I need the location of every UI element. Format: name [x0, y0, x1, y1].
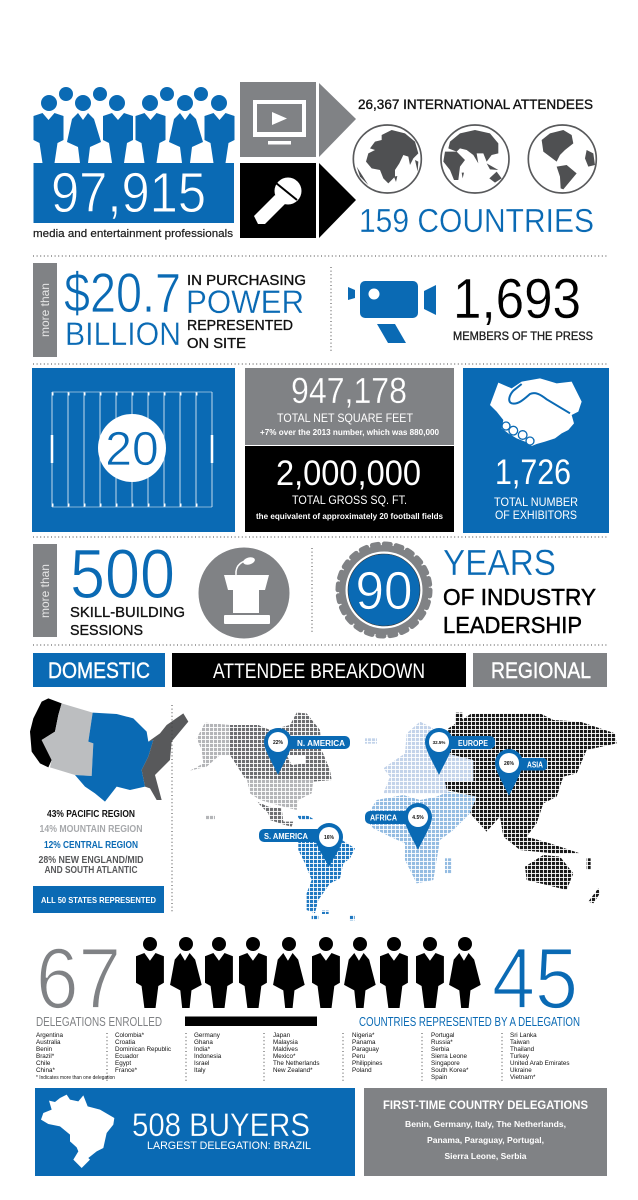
panel: gross square feet: the equivalent of approximately 20 football fields	[256, 512, 444, 521]
figure: billion: BILLION	[65, 316, 181, 352]
panel: net square feet: TOTAL NET SQUARE FEET	[277, 411, 414, 425]
legend: domestic regions	[38, 809, 144, 876]
list: delegations column 2: Colombia*	[115, 1032, 145, 1039]
icon: Brazil silhouette	[41, 1095, 114, 1168]
heading: countries represented: COUNTRIES REPRESENTED BY A DELEGATION	[359, 1015, 580, 1029]
icon: globe Americas	[528, 125, 596, 193]
list: delegations column 5: Panama	[352, 1039, 376, 1046]
figure: 45 countries: 45	[492, 931, 578, 1027]
black divider bar	[185, 1016, 317, 1026]
figure: 97,915: 97,915	[51, 161, 206, 225]
panel: skill-building sessions: SESSIONS	[70, 622, 143, 639]
list: delegations column 1: Australia	[36, 1039, 61, 1046]
pin: Europe 32.5%: 32.5%	[433, 740, 445, 745]
callout: all 50 states: ALL 50 STATES REPRESENTED	[41, 895, 156, 905]
chart: USA regional map	[30, 698, 188, 802]
pin: Europe 32.5%	[425, 728, 495, 775]
heading: regional: REGIONAL	[491, 658, 591, 683]
badge: 90	[338, 544, 430, 636]
icon: globe Africa and Europe	[353, 125, 421, 193]
list: delegations column 6: Singapore	[431, 1060, 460, 1067]
list: delegations column 7: Ukraine	[510, 1067, 532, 1074]
panel: skill-building sessions: SKILL-BUILDING	[70, 604, 185, 621]
chart: field lines	[52, 392, 212, 507]
chart: dotted world map	[190, 713, 617, 920]
list: delegations column 3: India*	[194, 1046, 211, 1053]
list: delegations column 1: * Indicates more than one delegation	[36, 1075, 115, 1081]
list: delegations column 4: Maldives	[273, 1046, 298, 1053]
panel: first-time country delegations: Sierra Leone, Serbia	[444, 1151, 527, 1161]
list: delegations column 4: The Netherlands	[273, 1060, 320, 1067]
pin: Asia 26%: ASIA	[527, 760, 543, 770]
list: delegations column 4: Japan	[273, 1032, 291, 1039]
list: delegations column 5: Philippines	[352, 1060, 382, 1067]
list: delegations column 1: Brazil*	[36, 1053, 55, 1060]
list: delegations column 3: Ghana	[194, 1039, 213, 1046]
list: delegations column 7: Turkey	[510, 1053, 530, 1060]
pin: Africa 4.5%: 4.5%	[412, 815, 424, 821]
panel: first-time country delegations: Panama, Paraguay, Portugal,	[427, 1135, 544, 1145]
panel: exhibitors: OF EXHIBITORS	[495, 510, 577, 522]
list: delegations column 6: Portugal	[431, 1032, 454, 1039]
list: delegations column 4	[273, 1032, 320, 1074]
icon: microphone	[254, 178, 302, 224]
list: delegations column 6: Sierra Leone	[431, 1053, 468, 1060]
blue total box	[34, 163, 234, 223]
list: delegations column 7: Vietnam*	[510, 1074, 536, 1081]
figure: $20.7: $20.7	[64, 261, 181, 324]
text: in purchasing power represented on site: IN PURCHASING	[187, 272, 306, 289]
list: delegations column 2: Ecuador	[115, 1053, 138, 1060]
pin: North America 22%: 22%	[273, 740, 284, 746]
icon: crowd of blue people	[34, 87, 234, 163]
panel: media and entertainment professionals	[33, 87, 234, 240]
panel: 508 buyers: 508 BUYERS	[132, 1107, 310, 1143]
legend: domestic regions: 14% MOUNTAIN REGION	[40, 824, 142, 835]
pin: Africa 4.5%	[365, 803, 432, 850]
icon: row of black delegates	[136, 937, 481, 1008]
figure: 67 delegations: 67	[36, 931, 121, 1027]
list: delegations column 5: Paraguay	[352, 1046, 380, 1053]
figure: 1,693: 1,693	[453, 267, 581, 331]
pin: South America 16%: S. AMERICA	[264, 832, 308, 841]
heading: 159 countries: 159 COUNTRIES	[359, 202, 594, 239]
list: delegations column 1: Benin	[36, 1046, 53, 1053]
pin: Europe 32.5%: EUROPE	[458, 739, 489, 748]
list: delegations column 3: Germany	[194, 1032, 221, 1039]
pin: North America 22%: N. AMERICA	[297, 739, 345, 748]
list: delegations column 3: Italy	[194, 1067, 206, 1074]
list: delegations column 4: Mexico*	[273, 1053, 296, 1060]
panel: net square feet	[245, 368, 454, 445]
panel: gross square feet: TOTAL GROSS SQ. FT.	[292, 493, 407, 507]
panel: skill-building sessions	[33, 535, 290, 639]
panel: purchasing power	[33, 261, 306, 357]
legend: domestic regions: 43% PACIFIC REGION	[47, 809, 135, 820]
list: delegations column 5	[352, 1032, 382, 1074]
pin: North America 22%	[264, 728, 350, 775]
heading: attendee breakdown: ATTENDEE BREAKDOWN	[213, 660, 425, 683]
caption: members of the press: MEMBERS OF THE PRESS	[453, 329, 593, 343]
panel: first-time country delegations: FIRST-TIME COUNTRY DELEGATIONS	[383, 1100, 588, 1112]
list: delegations column 1: Argentina	[36, 1032, 63, 1039]
list: delegations column 3	[194, 1032, 222, 1074]
list: delegations column 4: New Zealand*	[273, 1067, 313, 1074]
list: delegations column 7: Sri Lanka	[510, 1032, 537, 1039]
list: delegations column 6: Spain	[431, 1074, 448, 1081]
text: in purchasing power represented on site: ON SITE	[187, 335, 246, 352]
legend: domestic regions: 28% NEW ENGLAND/MID	[38, 855, 144, 866]
heading: delegations enrolled: DELEGATIONS ENROLLED	[36, 1015, 162, 1029]
pin: South America 16%	[259, 823, 343, 867]
figure: 500: 500	[70, 535, 175, 613]
caption: professionals: media and entertainment professionals	[33, 228, 234, 240]
list: delegations column 1	[36, 1032, 115, 1081]
panel: football field	[32, 368, 235, 532]
legend: domestic regions: 12% CENTRAL REGION	[44, 840, 138, 851]
list: delegations column 5: Nigeria*	[352, 1032, 375, 1039]
icon: globe Asia	[441, 125, 509, 193]
list: delegations column 6: Serbia	[431, 1046, 450, 1053]
pin: South America 16%: 16%	[324, 835, 335, 841]
pin: Asia 26%	[495, 749, 547, 796]
panel: gross square feet	[245, 446, 454, 532]
list: delegations column 7: United Arab Emirates	[510, 1060, 570, 1067]
list: delegations column 3: Israel	[194, 1060, 209, 1067]
legend: domestic regions: AND SOUTH ATLANTIC	[44, 865, 138, 876]
icon: handshake	[490, 378, 582, 446]
icon: video camera	[348, 281, 436, 343]
panel: years of industry leadership: LEADERSHIP	[443, 612, 582, 638]
map: Americas	[190, 713, 355, 920]
pin: Africa 4.5%: AFRICA	[370, 814, 397, 822]
list: delegations column 3: Indonesia	[194, 1053, 222, 1060]
panel: years of industry leadership: OF INDUSTRY	[443, 584, 596, 610]
badge: 90: 90	[356, 561, 412, 621]
pin: Asia 26%: 26%	[504, 761, 515, 767]
panel: exhibitors	[463, 368, 609, 533]
label: more than	[33, 544, 57, 637]
panel: net square feet: 947,178	[291, 370, 407, 411]
map: Europe, Africa, Asia, Oceania	[365, 713, 617, 903]
list: delegations column 2: France*	[115, 1067, 138, 1074]
panel: gross square feet: 2,000,000	[276, 454, 421, 493]
list: delegations column 2: Egypt	[115, 1060, 131, 1067]
heading: international attendees: 26,367 INTERNATIONAL ATTENDEES	[358, 96, 593, 112]
panel: first-time country delegations	[364, 1088, 607, 1176]
text: in purchasing power represented on site: POWER	[186, 284, 304, 320]
heading: regional	[473, 653, 607, 687]
list: delegations column 5: Peru	[352, 1053, 366, 1060]
list: delegations column 6: South Korea*	[431, 1067, 469, 1074]
list: delegations column 2	[115, 1032, 171, 1074]
text: in purchasing power represented on site	[186, 272, 306, 352]
list: delegations column 2: Croatia	[115, 1039, 136, 1046]
icon: podium	[198, 548, 290, 638]
callout: all 50 states	[33, 886, 164, 913]
panel: years of industry leadership	[338, 542, 596, 638]
list: delegations column 1: Chile	[36, 1060, 51, 1067]
panel: net square feet: +7% over the 2013 number, which was 880,000	[260, 428, 440, 437]
panel: 508 buyers: LARGEST DELEGATION: BRAZIL	[147, 1140, 311, 1152]
text: in purchasing power represented on site: REPRESENTED	[187, 317, 293, 334]
icon: monitor	[253, 100, 306, 144]
panel: 508 buyers	[35, 1088, 355, 1176]
list: delegations column 4: Malaysia	[273, 1039, 298, 1046]
list: delegations column 6: Russia*	[431, 1039, 453, 1046]
figure: 20 football fields: 20	[105, 423, 159, 476]
panel: exhibitors: TOTAL NUMBER	[494, 497, 578, 509]
panel: years of industry leadership: YEARS	[443, 542, 556, 583]
list: delegations column 2: Dominican Republic	[115, 1046, 171, 1053]
panel: monitor tile and arrow	[240, 82, 356, 157]
label: more than	[33, 263, 57, 357]
list: delegations column 7: Thailand	[510, 1046, 535, 1053]
list: delegations column 7: Taiwan	[510, 1039, 530, 1046]
heading: domestic: DOMESTIC	[48, 658, 150, 683]
panel: exhibitors: 1,726	[495, 453, 571, 492]
heading: attendee breakdown	[172, 653, 466, 687]
list: delegations column 7	[510, 1032, 570, 1081]
figure: 20 football fields	[98, 414, 166, 482]
label: more than: more than	[38, 564, 52, 618]
heading: domestic	[33, 653, 165, 687]
list: delegations column 1: China*	[36, 1067, 55, 1074]
list: delegations column 6	[431, 1032, 469, 1081]
panel: microphone tile and arrow	[240, 163, 356, 238]
panel: first-time country delegations: Benin, Germany, Italy, The Netherlands,	[405, 1119, 566, 1129]
label: more than: more than	[38, 283, 52, 337]
list: delegations column 5: Poland	[352, 1067, 372, 1074]
